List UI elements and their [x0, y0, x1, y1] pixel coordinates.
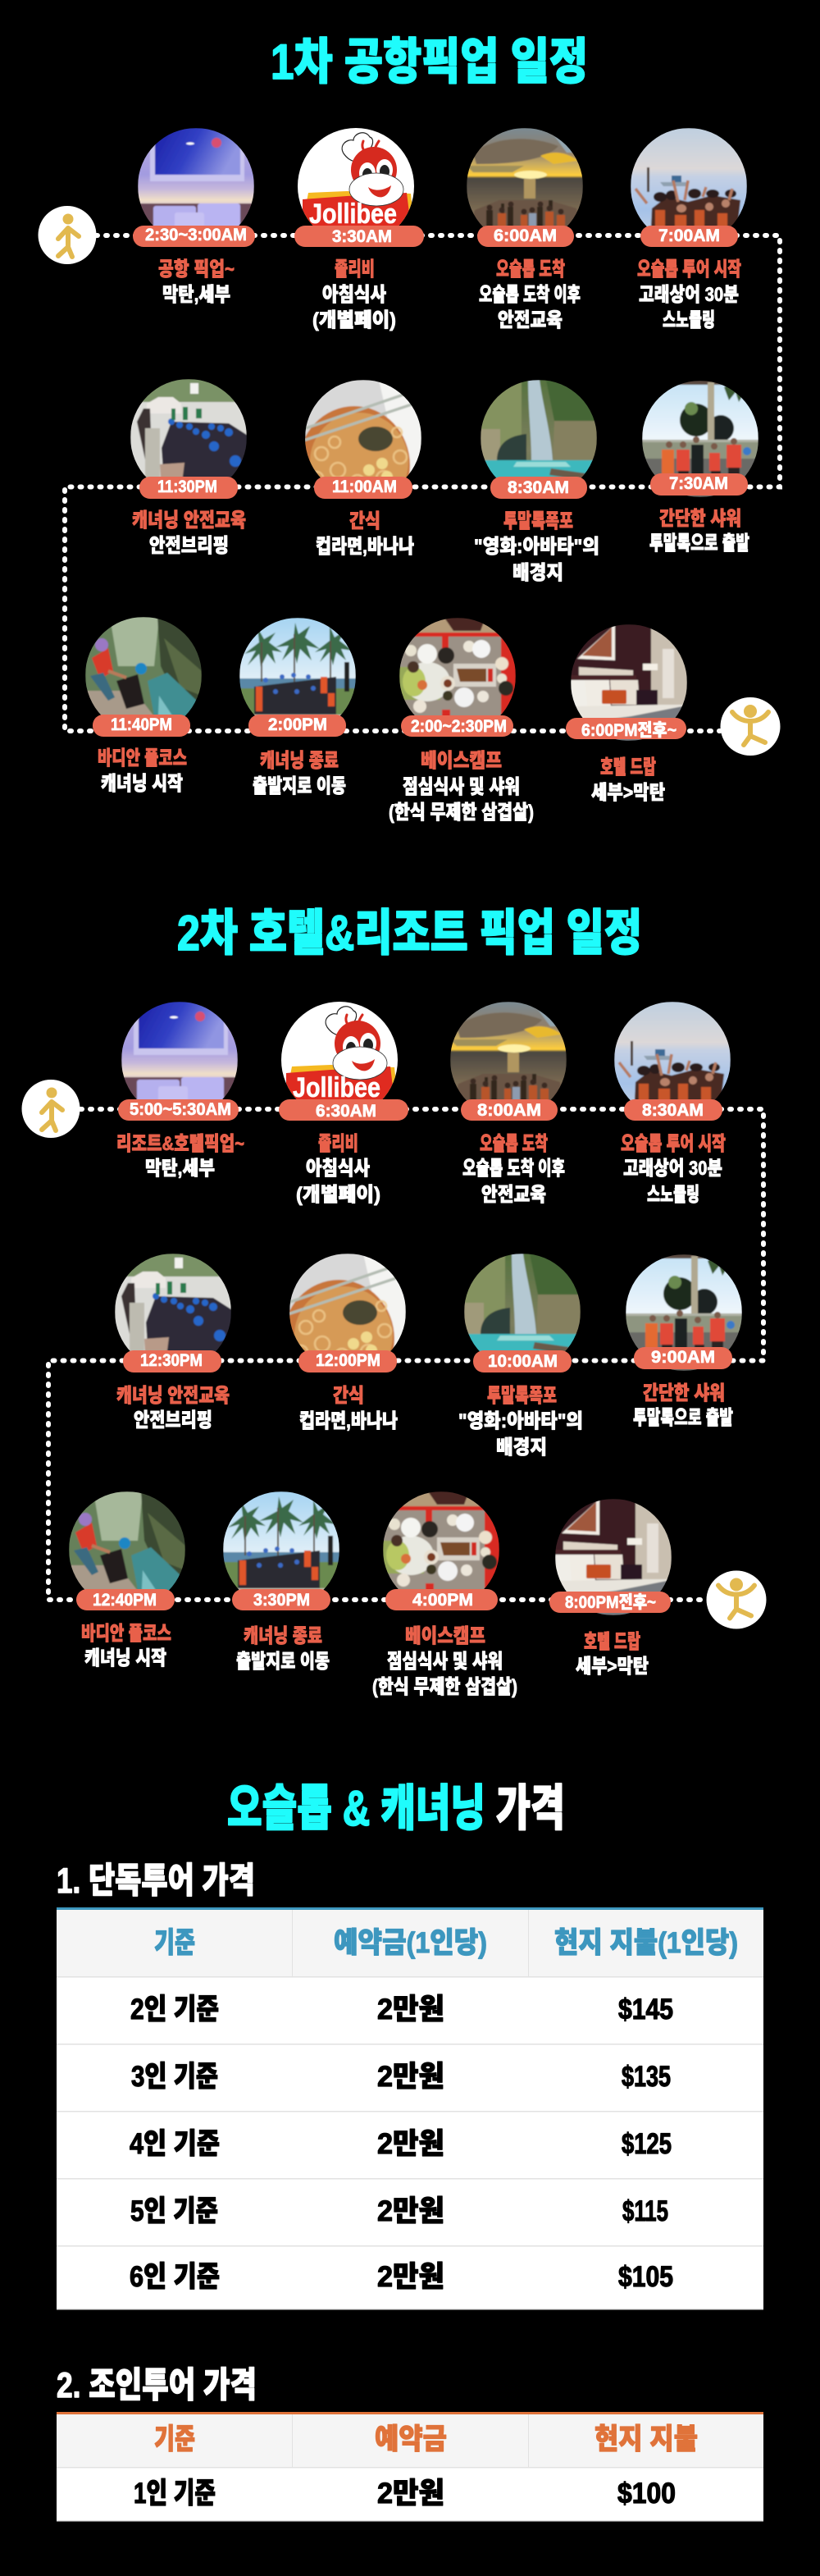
photo: Jollibee logo — [281, 1002, 398, 1099]
stop description: 바디안 풀코스 — [81, 1623, 171, 1645]
time pill — [139, 477, 238, 499]
photo: Korean meal — [399, 618, 516, 715]
stop description: 졸리비 — [335, 258, 375, 281]
time: 6:00PM전후~ — [581, 721, 676, 740]
stop: Tumalog falls — [474, 380, 599, 584]
time: 8:00AM — [477, 1101, 541, 1120]
row: 2 people — [130, 1994, 673, 2026]
stop description: 공항 픽업~ — [158, 258, 235, 281]
stop description: 간단한 샤워 — [643, 1382, 725, 1404]
time: 4:00PM — [412, 1591, 473, 1610]
time pill — [401, 715, 513, 737]
time: 8:30AM — [508, 478, 569, 497]
table header: 예약금 — [375, 2423, 447, 2455]
row: 1 person — [134, 2478, 676, 2510]
stop description: 캐녀닝 시작 — [101, 773, 183, 795]
icon: jumping person end — [707, 1570, 766, 1629]
stop: Badian full course — [69, 1491, 185, 1669]
stop description: 캐녀닝 안전교육 — [132, 509, 246, 532]
stop description: 리조트&호텔픽업~ — [116, 1133, 244, 1155]
photo: hotel bedroom — [555, 1499, 672, 1615]
route: dotted path — [48, 1109, 763, 1600]
stop description: 오슬롭 투어 시작 — [621, 1133, 726, 1155]
photo: Jollibee logo: Jollibee — [293, 1072, 380, 1103]
stop description: 아침식사 — [322, 284, 386, 306]
heading: join tour price: 2. 조인투어 가격 — [57, 2366, 257, 2405]
stop: hotel drop — [566, 624, 687, 804]
time: 3:30PM — [253, 1591, 310, 1610]
time pill — [549, 1592, 671, 1613]
stop: resort and hotel pickup — [116, 1002, 244, 1180]
stop description — [316, 510, 414, 558]
stop: Tumalog falls — [458, 1254, 583, 1459]
stop description — [591, 756, 665, 804]
stop: snack — [283, 1254, 406, 1432]
row: 3 people: $135 — [622, 2061, 671, 2093]
time pill — [232, 1589, 330, 1610]
stop description — [132, 509, 246, 557]
time: 3:30AM — [332, 227, 392, 246]
icon: walking person start — [38, 206, 97, 264]
stop description — [158, 258, 235, 306]
row: 1 person: 2만원 — [377, 2478, 444, 2510]
photo: whale shark tour group — [614, 1002, 731, 1101]
time pill — [76, 1589, 175, 1610]
time pill — [123, 1350, 221, 1372]
time: 10:00AM — [488, 1352, 558, 1371]
row: 2 people: $145 — [618, 1994, 673, 2026]
stop description: 투말록폭포 — [503, 510, 573, 532]
stop: hotel drop — [549, 1499, 672, 1678]
time: 12:30PM — [140, 1351, 203, 1370]
title: price section: 오슬롭 & 캐녀닝 — [227, 1781, 485, 1836]
time: 12:00PM — [316, 1351, 380, 1370]
stop description — [253, 750, 346, 797]
title: first pickup schedule: 1차 공항픽업 일정 — [271, 34, 588, 89]
stop description: 안전교육 — [498, 309, 563, 331]
stop description — [576, 1631, 649, 1678]
photo: Jollibee logo: Jollibee — [309, 199, 397, 230]
time pill — [248, 715, 346, 737]
time: 11:40PM — [111, 715, 172, 734]
time: 7:00AM — [658, 226, 720, 245]
photo: helmeted group — [130, 379, 247, 477]
time: 5:00~5:30AM — [130, 1100, 231, 1119]
stop description: 아침식사 — [306, 1158, 370, 1180]
time: 7:30AM — [669, 474, 728, 493]
time pill — [477, 226, 574, 247]
stop description: 점심식사 및 샤워 — [387, 1651, 503, 1673]
stop description — [649, 508, 749, 555]
icon: walking person start — [21, 1080, 80, 1138]
stop description: 스노클링 — [663, 309, 715, 331]
stop: canyoning safety briefing — [130, 379, 247, 557]
photo: cup noodles — [289, 1254, 406, 1351]
stop description: "영화:아바타"의 — [474, 536, 599, 558]
stop description: 간식 — [333, 1385, 364, 1407]
panel: first pickup timeline — [38, 128, 781, 824]
photo: group under palm — [642, 381, 758, 497]
stop description — [81, 1623, 171, 1669]
photo: group with palms — [223, 1491, 339, 1608]
stop description — [474, 510, 599, 584]
stop description: 캐녀닝 종료 — [244, 1625, 322, 1647]
row: 6 people: $105 — [618, 2261, 673, 2293]
stop description: 배경지 — [512, 562, 563, 584]
table header: 현지 지불 — [594, 2423, 698, 2455]
photo: hotel room — [121, 1002, 238, 1099]
stop description: 안전브리핑 — [149, 535, 229, 557]
table header: 기준 — [154, 1927, 195, 1959]
time: 6:00AM — [494, 226, 557, 245]
stop description — [372, 1625, 517, 1698]
stop description — [633, 1382, 733, 1429]
stop description: "영화:아바타"의 — [458, 1410, 583, 1432]
stop description: 출발지로 이동 — [236, 1651, 330, 1673]
row: 4 people — [130, 2128, 672, 2160]
photo: sunrise — [467, 128, 583, 226]
row: 5 people: $115 — [622, 2195, 668, 2227]
stop: snack — [298, 380, 421, 558]
row: 6 people: 2만원 — [377, 2261, 444, 2293]
row: 6 people: 6인 기준 — [130, 2261, 220, 2293]
row: 2 people: 2인 기준 — [130, 1994, 219, 2026]
stop description: 오슬롭 도착 이후 — [479, 284, 581, 306]
stop description: 베이스캠프 — [421, 750, 502, 772]
row: 3 people: 3인 기준 — [131, 2061, 218, 2093]
stop description — [236, 1625, 330, 1673]
stop description: 바디안 풀코스 — [98, 747, 187, 770]
stop description — [116, 1385, 230, 1432]
photo: group with palms — [239, 618, 356, 715]
table header — [154, 1927, 738, 1959]
stop description: 점심식사 및 샤워 — [403, 776, 520, 798]
stop description: 투말록으로 출발 — [633, 1407, 733, 1429]
stop description: 베이스캠프 — [405, 1625, 485, 1647]
time: 2:30~3:00AM — [145, 226, 247, 244]
time pill — [279, 1099, 408, 1121]
panel: second pickup timeline — [21, 1002, 766, 1698]
photo: cup noodles — [305, 380, 421, 477]
photo: hotel room — [138, 128, 254, 226]
stop: canyoning safety briefing — [115, 1254, 231, 1432]
stop: Jollibee breakfast — [279, 1002, 408, 1206]
row: 1 person: $100 — [617, 2478, 676, 2510]
time pill — [461, 1099, 558, 1121]
stop description: 스노클링 — [647, 1184, 699, 1206]
time: 6:30AM — [316, 1102, 376, 1121]
table header — [154, 2423, 698, 2455]
stop description: 오슬롭 도착 — [496, 258, 565, 281]
photo: waterfall — [464, 1254, 581, 1370]
stop description — [389, 750, 534, 824]
photo: whale shark tour group — [631, 128, 747, 226]
stop: Oslob arrival — [450, 1002, 567, 1206]
stop description: 막탄,세부 — [162, 284, 230, 306]
time pill — [314, 477, 412, 499]
time: 12:40PM — [93, 1591, 157, 1610]
stop: Badian full course — [85, 617, 202, 795]
title: price section: 가격 — [496, 1781, 565, 1836]
stop description — [299, 1385, 398, 1432]
row: 4 people: 4인 기준 — [130, 2128, 220, 2160]
stop description: 막탄,세부 — [145, 1158, 215, 1180]
time pill — [566, 718, 686, 739]
stop description: (한식 무제한 삼겹살) — [372, 1676, 517, 1698]
time: 2:00~2:30PM — [411, 717, 507, 736]
time pill — [294, 226, 424, 247]
stop description: 투말록폭포 — [487, 1385, 557, 1407]
stop: quick shower — [626, 1254, 742, 1429]
stop description — [479, 258, 581, 331]
heading: private tour price: 1. 단독투어 가격 — [57, 1861, 255, 1901]
stop: airport pickup — [133, 128, 255, 306]
icon: jumping person end — [720, 697, 781, 756]
stop description: 간단한 샤워 — [659, 508, 741, 530]
time pill — [118, 1099, 239, 1121]
stop description: 안전브리핑 — [134, 1409, 212, 1432]
time pill — [634, 1347, 732, 1369]
stop description — [458, 1385, 583, 1459]
stop description — [462, 1133, 565, 1206]
stop: Jollibee breakfast — [294, 128, 424, 331]
stop description: 고래상어 30분 — [623, 1158, 722, 1180]
time pill — [640, 226, 738, 247]
row: 4 people: 2만원 — [377, 2128, 444, 2160]
time: 11:30PM — [157, 477, 217, 496]
stop description: (개별페이) — [312, 309, 396, 331]
stop description: 캐녀닝 종료 — [260, 750, 339, 772]
table header: 기준 — [154, 2423, 195, 2455]
stop description: 고래상어 30분 — [639, 284, 739, 306]
stop description: 세부>막탄 — [576, 1656, 649, 1678]
stop description: 안전교육 — [481, 1184, 546, 1206]
stop: canyoning end — [239, 618, 356, 797]
stop description: (한식 무제한 삼겹살) — [389, 802, 534, 824]
stop description: 호텔 드랍 — [600, 756, 656, 779]
stop: Oslob tour start — [631, 128, 747, 331]
stop description: (개별페이) — [296, 1184, 380, 1206]
time: 8:30AM — [642, 1101, 704, 1120]
stop description: 캐녀닝 시작 — [84, 1647, 166, 1669]
table: private tour price — [57, 1907, 763, 2310]
row: 5 people: 2만원 — [377, 2195, 444, 2227]
stop description — [312, 258, 396, 331]
stop description: 출발지로 이동 — [253, 775, 346, 797]
stop description — [116, 1133, 244, 1180]
photo: hotel bedroom — [571, 624, 687, 741]
stop description: 간식 — [349, 510, 380, 532]
stop description — [637, 258, 741, 331]
time: 2:00PM — [268, 715, 327, 734]
stop description: 오슬롭 도착 이후 — [462, 1158, 565, 1180]
route: dotted path — [65, 235, 780, 731]
time pill — [650, 473, 748, 496]
stop: quick shower — [642, 381, 758, 555]
table: join tour price — [57, 2412, 763, 2522]
stop: canyoning end — [223, 1491, 339, 1673]
row: 2 people: 2만원 — [377, 1994, 444, 2026]
photo: canyon — [69, 1491, 185, 1608]
row: 5 people: 5인 기준 — [130, 2195, 218, 2227]
stop: base camp — [389, 618, 534, 824]
time pill — [624, 1099, 722, 1121]
stop description: 배경지 — [496, 1436, 547, 1459]
photo: waterfall — [481, 380, 597, 477]
stop: Oslob arrival — [467, 128, 583, 331]
stop: Oslob tour start — [614, 1002, 731, 1206]
row: 1 person: 1인 기준 — [134, 2478, 216, 2510]
stop description: 투말록으로 출발 — [649, 532, 749, 555]
row: 3 people — [131, 2061, 671, 2093]
row: 6 people — [130, 2261, 673, 2293]
stop description — [98, 747, 187, 795]
table header: 현지 지불(1인당) — [554, 1927, 738, 1959]
time pill — [385, 1589, 498, 1610]
stop description: 호텔 드랍 — [584, 1631, 640, 1653]
stop: base camp — [372, 1491, 517, 1698]
stop description — [621, 1133, 726, 1206]
time pill — [133, 226, 255, 247]
table header: 예약금(1인당) — [334, 1927, 487, 1959]
photo: canyon — [85, 617, 202, 716]
stop description: 컵라면,바나나 — [299, 1410, 398, 1432]
stop description: 오슬롭 투어 시작 — [637, 258, 741, 281]
time pill — [490, 477, 587, 499]
stop description — [296, 1133, 380, 1206]
time pill — [473, 1350, 572, 1372]
stop description: 세부>막탄 — [591, 782, 665, 804]
title: second pickup schedule: 2차 호텔&리조트 픽업 일정 — [177, 906, 642, 961]
time: 9:00AM — [651, 1348, 715, 1367]
stop description: 컵라면,바나나 — [316, 536, 414, 558]
photo: helmeted group — [115, 1254, 231, 1352]
photo: Jollibee logo — [298, 128, 414, 226]
row: 3 people: 2만원 — [377, 2061, 444, 2093]
photo: Korean meal — [383, 1491, 499, 1608]
row: 5 people — [130, 2195, 668, 2227]
time: 11:00AM — [332, 477, 397, 496]
time pill — [93, 715, 190, 737]
photo: sunrise — [450, 1002, 567, 1101]
stop description: 오슬롭 도착 — [480, 1133, 548, 1155]
stop description: 졸리비 — [318, 1133, 358, 1155]
time: 8:00PM전후~ — [565, 1593, 656, 1612]
row: 4 people: $125 — [622, 2128, 672, 2160]
stop description: 캐녀닝 안전교육 — [116, 1385, 230, 1407]
time pill — [298, 1350, 397, 1372]
photo: group under palm — [626, 1254, 742, 1371]
